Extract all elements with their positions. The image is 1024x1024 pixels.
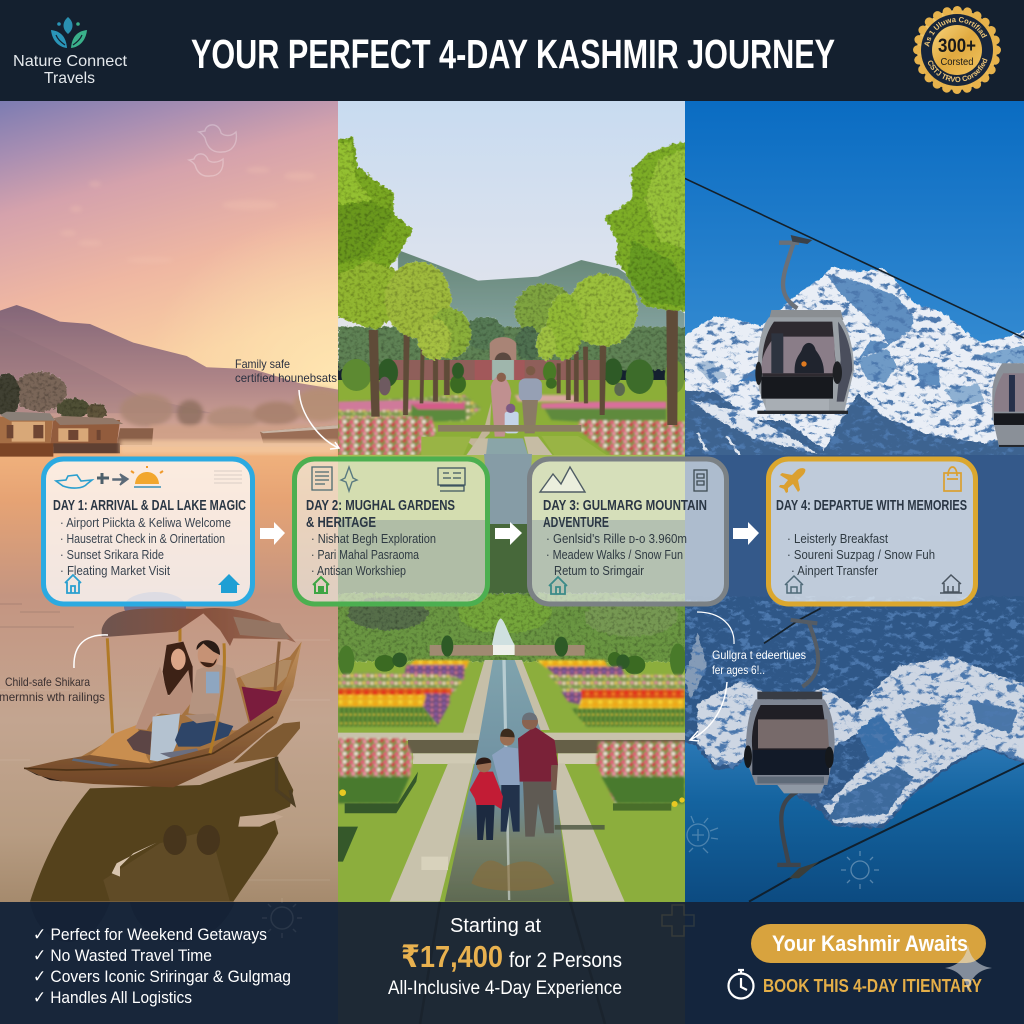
- callout: gulmarg adventures: Gullgra t edeertiues: [712, 648, 806, 662]
- icon: teal house: [549, 577, 567, 594]
- clouds: [93, 182, 97, 185]
- dark mountain mid band: [685, 455, 1024, 615]
- lake water: [0, 445, 338, 903]
- upper paths and channel: [468, 402, 492, 446]
- day 3 bullet list: · Genlsid's Rille ᴅ-o 3.960m: [546, 531, 687, 546]
- price block: Starting at: [450, 915, 541, 937]
- day 1 bullet list: · Airport Piickta & Keliwa Welcome: [60, 515, 231, 530]
- icon: faint sun: [841, 851, 879, 889]
- gondola cabin: [755, 235, 854, 414]
- hazy distant trees: [120, 388, 347, 430]
- girl: [470, 758, 503, 840]
- icon: stopwatch: [728, 970, 754, 998]
- hedge shadow: [555, 825, 605, 830]
- faint texture lines: [214, 471, 242, 483]
- left flower beds: [338, 660, 470, 727]
- reflected gondola and cables: [744, 608, 1024, 902]
- day 3 heading: ADVENTURE: [543, 515, 609, 531]
- icon: compass star: [341, 467, 357, 491]
- day 3 bullet list: Retum to Srimgair: [554, 563, 645, 578]
- stone walkways: [463, 660, 494, 733]
- woman: [127, 642, 193, 763]
- company name: Nature Connect: [13, 53, 128, 70]
- icon: certificate: [438, 468, 465, 491]
- mountains, trees and houseboats: [0, 305, 347, 457]
- day 4 bullet list: · Leisterly Breakfast: [787, 531, 888, 546]
- icon: outline house: [65, 575, 81, 593]
- benefits checklist: ✓ Handles All Logistics: [33, 988, 192, 1007]
- day 2 bullet list: · Antisan Workshiep: [311, 563, 406, 578]
- icon: plane: [779, 468, 805, 493]
- badge: 300+ certified: [913, 6, 1001, 94]
- lower flower beds: [338, 738, 685, 803]
- second gondola: [992, 363, 1024, 447]
- callout: family safe houseboats: Family safe: [235, 357, 290, 371]
- water ripples: [0, 604, 330, 880]
- logo: Nature Connect Travels: [13, 17, 128, 87]
- day 2 heading: DAY 2: MUGHAL GARDENS: [306, 498, 455, 514]
- topiary: [338, 635, 686, 677]
- icon: mountains: [540, 467, 585, 492]
- day 3 heading: DAY 3: GULMARG MOUNTAIN: [543, 498, 707, 514]
- hedges: [341, 358, 685, 396]
- icon: lotus: [51, 17, 87, 48]
- day 1 heading: DAY 1: ARRIVAL & DAL LAKE MAGIC: [53, 498, 246, 514]
- icon: scroll: [312, 467, 332, 490]
- callout: gulmarg adventures: [690, 612, 806, 741]
- header bar: [0, 0, 1024, 101]
- icon: pass: [694, 470, 707, 491]
- hills: [398, 251, 685, 328]
- canopy: [102, 608, 296, 646]
- callout: family safe houseboats: certified hounebsats: [235, 371, 337, 385]
- day 1 bullet list: [60, 515, 231, 578]
- panel: Dal Lake sunset photo: [0, 101, 347, 903]
- benefits checklist: [33, 925, 291, 1007]
- tree trunks: [369, 307, 678, 425]
- arrow: day 1 to day 2: [260, 522, 285, 545]
- sun glow: [216, 249, 338, 390]
- card: Day 2: [294, 459, 488, 604]
- benefits checklist: ✓ Covers Iconic Sriringar & Gulgmag: [33, 967, 291, 986]
- central water channel: [484, 454, 532, 524]
- icon: duck outlines: [189, 125, 236, 176]
- yellow tulips: [339, 789, 685, 807]
- shikara boat with couple: [24, 608, 302, 787]
- canopy poles: [107, 623, 279, 753]
- canopy peak behind card: [124, 592, 186, 611]
- clear sky: [338, 101, 685, 361]
- company name: Travels: [44, 70, 95, 87]
- day 4 heading: DAY 4: DEPARTUE WITH MEMORIES: [776, 498, 967, 514]
- badge: 300+ certified: As 1 Uluwa Cortifiad: [924, 17, 988, 47]
- man: [175, 640, 250, 747]
- sunset sky: [0, 101, 338, 390]
- icon: faint footer plus: [662, 905, 694, 936]
- cross path and steps: [338, 733, 688, 741]
- lawn: [338, 380, 688, 460]
- price block: ₹17,400: [401, 939, 503, 974]
- benefits checklist: ✓ Perfect for Weekend Getaways: [33, 925, 267, 944]
- badge: 300+ certified: CSTJ TRVO Corsefied: [928, 58, 988, 82]
- card: Day 4: [768, 459, 976, 604]
- lower garden scene: [328, 593, 698, 905]
- icon: green house: [313, 577, 329, 593]
- day 4 bullet list: [787, 531, 935, 578]
- button: Your Kashmir Awaits: [751, 924, 986, 963]
- day 1 bullet list: · Fleating Market Visit: [60, 563, 170, 578]
- near trees: [0, 372, 107, 420]
- icon: sparkle: [945, 945, 992, 992]
- reflected mountains: [677, 597, 1024, 828]
- icon: outline house left: [785, 576, 803, 593]
- fountain: [492, 618, 515, 645]
- wall and gate: [391, 360, 605, 380]
- callout: gulmarg adventures: fer ages 6!..: [712, 663, 765, 677]
- panel: Gulmarg gondola photo: [677, 101, 1024, 905]
- day 1 bullet list: · Sunset Srikara Ride: [60, 547, 164, 562]
- foliage: left tree row: [328, 137, 471, 360]
- hazy mist on lake: [120, 440, 338, 454]
- icon: shopping bag: [944, 467, 961, 491]
- upper garden scene: [328, 137, 698, 460]
- panel: Mughal garden photo: [328, 101, 698, 905]
- callout: child-safe shikara: [0, 635, 108, 704]
- icon: outline house right: [940, 575, 962, 593]
- background foliage: [338, 283, 688, 370]
- father: [518, 712, 558, 837]
- benefits checklist: ✓ No Wasted Travel Time: [33, 946, 212, 965]
- shikara reflection: [30, 757, 293, 902]
- callout: family safe houseboats: [235, 357, 339, 449]
- background trees: [328, 593, 698, 662]
- day 4 bullet list: · Ainpert Transfer: [791, 563, 879, 578]
- bed hedges: [338, 772, 671, 862]
- price block: All-Inclusive 4-Day Experience: [388, 978, 622, 999]
- boy: [492, 729, 520, 832]
- icon: faint footer sun: [262, 898, 302, 938]
- day 2 bullet list: [311, 531, 436, 578]
- badge: 300+ certified: Corsted: [940, 57, 974, 68]
- snow mountains: [677, 267, 1024, 473]
- channel reflection: [471, 860, 555, 891]
- footer bar: [0, 902, 1024, 1024]
- callout: child-safe shikara: Child-safe Shikara: [5, 675, 90, 689]
- upper cable: [684, 178, 1024, 338]
- day 4 bullet list: · Soureni Suzpag / Snow Fuh: [787, 547, 935, 562]
- callout: child-safe shikara: mermnis wth railings: [0, 690, 105, 704]
- card: Day 1: [44, 459, 252, 604]
- button: Your Kashmir Awaits: Your Kashmir Awaits: [772, 931, 968, 956]
- card: Day 3: [530, 459, 726, 604]
- day 2 bullet list: · Nishat Begh Exploration: [311, 531, 436, 546]
- arrow: day 3 to day 4: [733, 522, 759, 545]
- call to action text: BOOK THIS 4-DAY ITIENTARY: [763, 976, 982, 996]
- day 3 bullet list: [546, 531, 687, 578]
- hull: [24, 642, 302, 787]
- blue sky: [685, 101, 1024, 461]
- day 1 bullet list: · Hausetrat Check in & Orinertation: [60, 531, 225, 546]
- badge: 300+ certified: 300+: [938, 36, 976, 57]
- family walking in distance: [491, 366, 542, 437]
- day 2 heading: & HERITAGE: [306, 515, 376, 531]
- icon: boat, plane, arrow, sun: [56, 466, 163, 488]
- icon: solid house: [218, 574, 240, 593]
- right flower beds: [536, 660, 685, 727]
- icon: faint flower plus: [687, 816, 718, 853]
- water surface: [685, 700, 1024, 905]
- mid garden behind cards: [338, 455, 685, 520]
- day 2 bullet list: · Pari Mahal Pasraoma: [311, 547, 420, 562]
- water channel: [445, 660, 570, 902]
- day 3 bullet list: · Meadew Walks / Snow Fun: [546, 547, 683, 562]
- arrow: day 2 to day 3: [495, 522, 522, 545]
- price block: for 2 Persons: [509, 949, 622, 972]
- lawn base: [338, 660, 685, 902]
- cushions: [242, 687, 287, 722]
- price block: [388, 915, 622, 999]
- foliage: right tree row: [536, 140, 698, 360]
- flower beds: [338, 395, 685, 455]
